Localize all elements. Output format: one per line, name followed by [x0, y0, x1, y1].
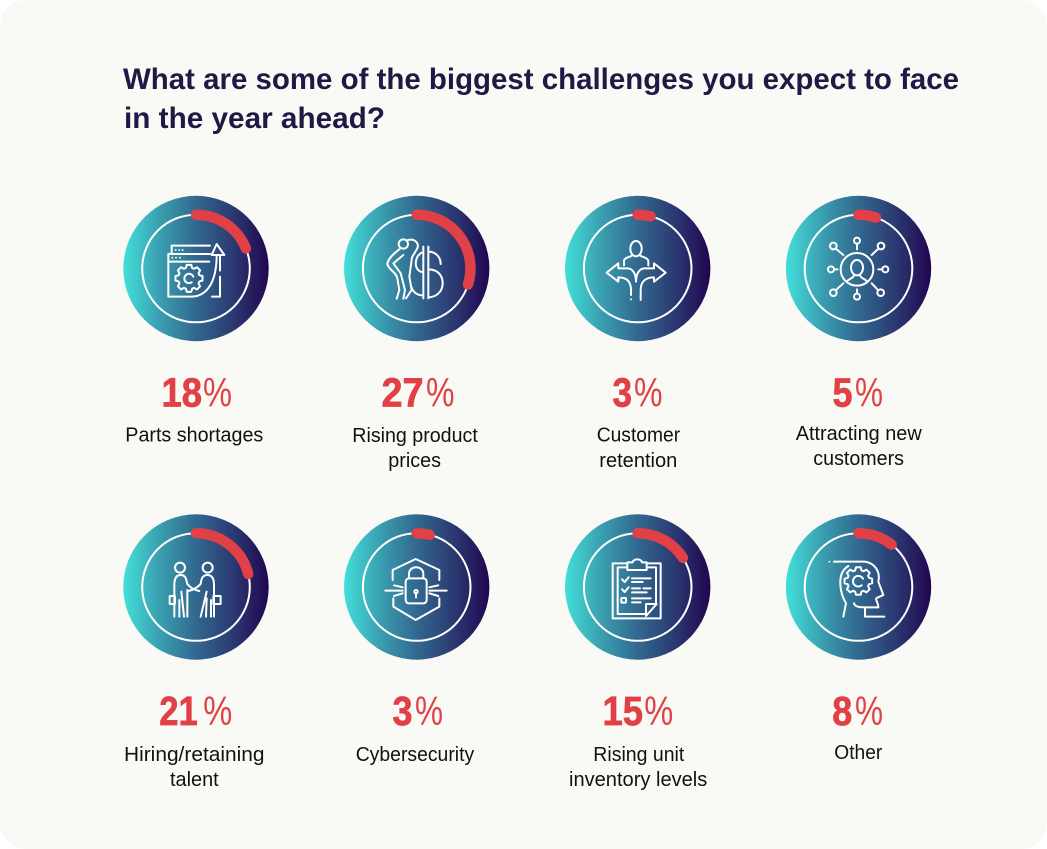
- icon: head with gear: [828, 561, 884, 617]
- label: attracting new customers: customers: [813, 448, 904, 470]
- label: other: Other: [834, 742, 883, 764]
- label: hiring and retaining talent: Hiring/retaining: [124, 744, 264, 766]
- progress ring: [363, 533, 471, 641]
- progress arc 27%: [417, 215, 470, 284]
- title: [123, 63, 959, 135]
- label: rising unit inventory levels: [569, 744, 707, 791]
- panel: attracting new customers: [786, 196, 931, 470]
- icon: shield with padlock: [385, 559, 447, 620]
- stat: 15%: %: [644, 688, 673, 734]
- stat: 21%: 21: [159, 688, 198, 734]
- panel: other: [786, 514, 931, 764]
- label: attracting new customers: Attracting new: [796, 423, 922, 445]
- badge circle: [565, 514, 710, 660]
- stat: 3%: %: [634, 370, 662, 416]
- stat: 5%: %: [855, 370, 883, 416]
- panel: parts shortages: [123, 196, 269, 446]
- panel: hiring and retaining talent: [123, 514, 269, 791]
- stat: 3%: 3: [392, 688, 412, 734]
- progress arc 15%: [638, 533, 683, 558]
- label: hiring and retaining talent: [124, 744, 264, 791]
- panel: cybersecurity: [344, 514, 489, 766]
- stat: 8%: [832, 688, 883, 734]
- badge circle: [786, 514, 931, 660]
- stat: 3%: [392, 688, 443, 734]
- icon: person network: [828, 238, 888, 300]
- icon: person at forked arrows: [607, 241, 666, 300]
- stat: 5%: [832, 370, 883, 416]
- stat: 18%: %: [203, 370, 232, 416]
- stat: 15%: 15: [602, 688, 643, 734]
- progress ring: [584, 533, 692, 641]
- label: customer retention: retention: [599, 450, 677, 472]
- stat: 27%: [382, 370, 454, 416]
- label: customer retention: [597, 424, 681, 472]
- label: rising product prices: prices: [388, 450, 441, 472]
- progress arc 5%: [858, 215, 876, 218]
- label: hiring and retaining talent: talent: [170, 769, 219, 791]
- panel: rising product prices: [344, 196, 489, 472]
- progress ring: [142, 215, 250, 322]
- stat: 3%: [612, 370, 662, 416]
- label: rising unit inventory levels: Rising unit: [593, 744, 685, 766]
- badge circle: [123, 196, 269, 341]
- stat: 21%: %: [203, 688, 232, 734]
- badge circle: [344, 196, 489, 341]
- panel: customer retention: [565, 196, 710, 472]
- label: rising product prices: Rising product: [352, 425, 478, 447]
- stat: 27%: %: [426, 370, 454, 416]
- stat: 3%: %: [415, 688, 443, 734]
- progress ring: [142, 533, 250, 641]
- progress ring: [805, 533, 912, 641]
- label: attracting new customers: [796, 423, 922, 470]
- progress ring: [584, 215, 692, 322]
- progress arc 3%: [638, 215, 651, 216]
- label: rising product prices: [352, 425, 478, 472]
- stat: 8%: %: [855, 688, 883, 734]
- progress arc 3%: [417, 533, 430, 535]
- stat: 5%: 5: [832, 370, 852, 416]
- label: cybersecurity: Cybersecurity: [356, 744, 474, 766]
- stat: 27%: 27: [382, 370, 424, 416]
- title: What are some of the biggest challenges you expect to face: [123, 63, 959, 96]
- panel: rising unit inventory levels: [565, 514, 710, 791]
- badge circle: [344, 514, 489, 660]
- icon: figure leaning on dollar sign: [387, 239, 443, 299]
- icon: windows with gear and arrow: [168, 244, 224, 297]
- stat: 15%: [602, 688, 673, 734]
- title: in the year ahead?: [124, 102, 385, 135]
- progress ring: [805, 215, 912, 322]
- stat: 8%: 8: [832, 688, 852, 734]
- progress ring: [363, 215, 471, 322]
- label: customer retention: Customer: [597, 424, 681, 446]
- progress arc 21%: [196, 533, 248, 574]
- stat: 3%: 3: [612, 370, 632, 416]
- stat: 18%: [162, 370, 232, 416]
- stat: 18%: 18: [162, 370, 202, 416]
- badge circle: [123, 514, 269, 660]
- progress arc 8%: [858, 533, 892, 545]
- stat: 21%: [159, 688, 232, 734]
- icon: clipboard checklist: [613, 559, 661, 618]
- label: parts shortages: Parts shortages: [125, 424, 263, 446]
- label: rising unit inventory levels: inventory levels: [569, 769, 707, 791]
- progress arc 18%: [196, 215, 246, 248]
- badge circle: [565, 196, 710, 341]
- icon: handshake: [170, 563, 221, 617]
- badge circle: [786, 196, 931, 341]
